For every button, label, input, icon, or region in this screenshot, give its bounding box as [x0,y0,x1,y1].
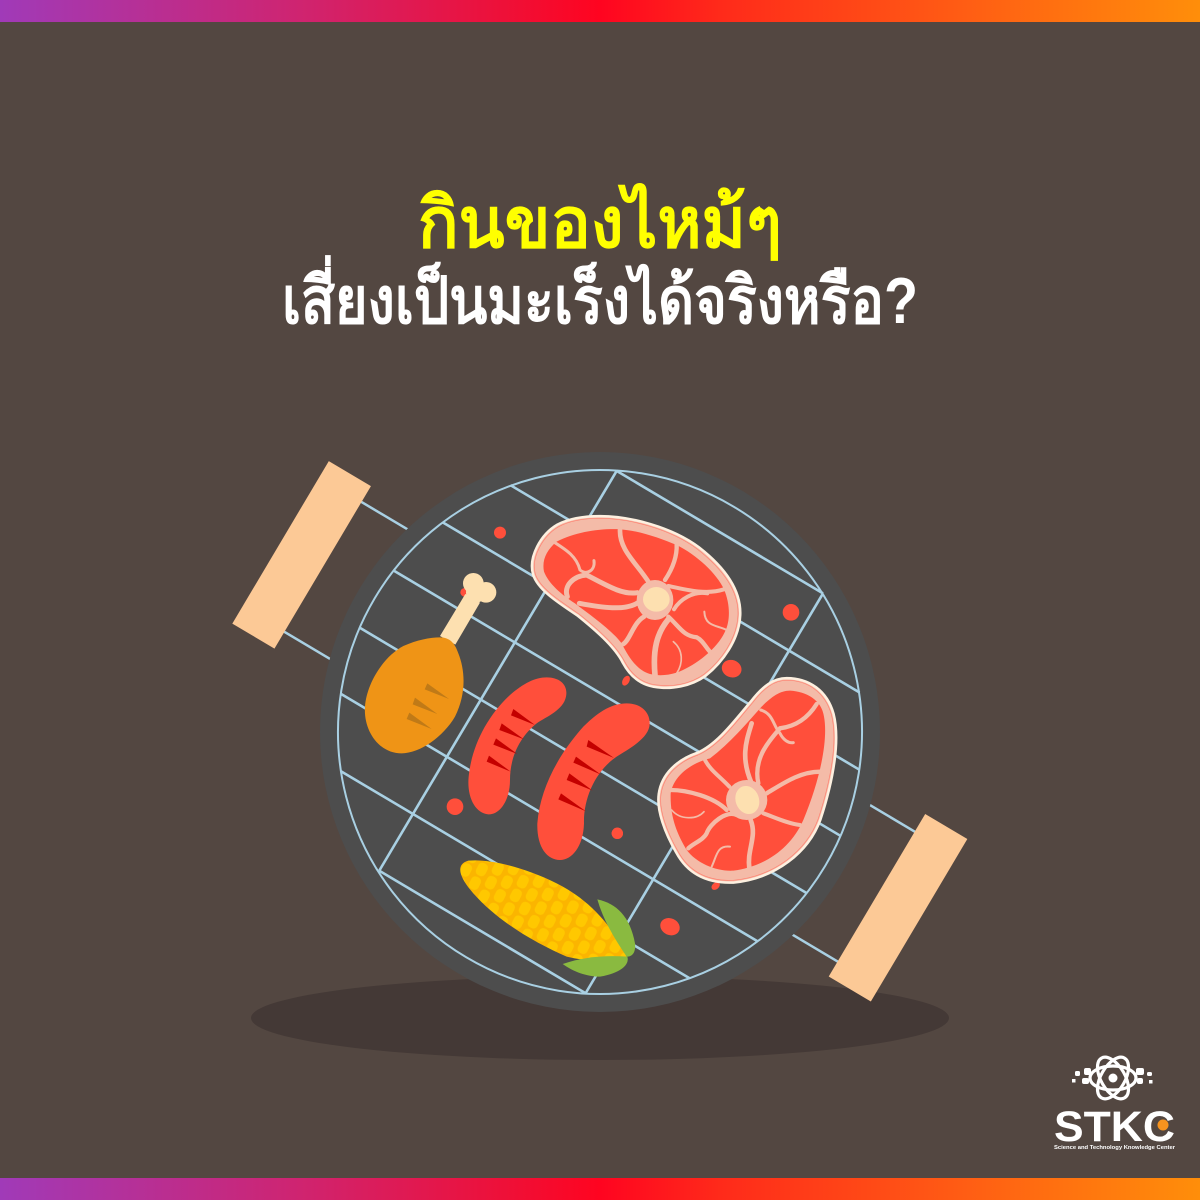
steak one [533,517,739,687]
grill grate [241,373,959,1091]
grease drops near chicken [447,527,683,938]
ground shadow [251,976,949,1060]
title [282,182,918,337]
logo atom icon [1072,1052,1152,1104]
corn [460,860,635,977]
food, lower-left crop coordinates [365,527,683,977]
grease drops near steaks [612,604,799,892]
logo orange dot [1158,1120,1168,1130]
logo: STKC [1054,1052,1176,1151]
food, upper-right crop coordinates [533,517,835,892]
logo wordmark: STKC [1054,1103,1175,1151]
title: กินของไหม้ๆ [418,182,782,262]
sausage one [468,677,566,814]
grill handles [232,460,967,1002]
grill body [320,452,880,1012]
sausage two [537,703,650,860]
bottom gradient bar [0,1178,1200,1200]
title: เสี่ยงเป็นมะเร็งได้จริงหรือ? [282,255,918,337]
logo tagline: Science and Technology Knowledge Center [1054,1145,1176,1151]
steak two [660,679,835,881]
top gradient bar [0,0,1200,22]
chicken leg [365,573,496,753]
